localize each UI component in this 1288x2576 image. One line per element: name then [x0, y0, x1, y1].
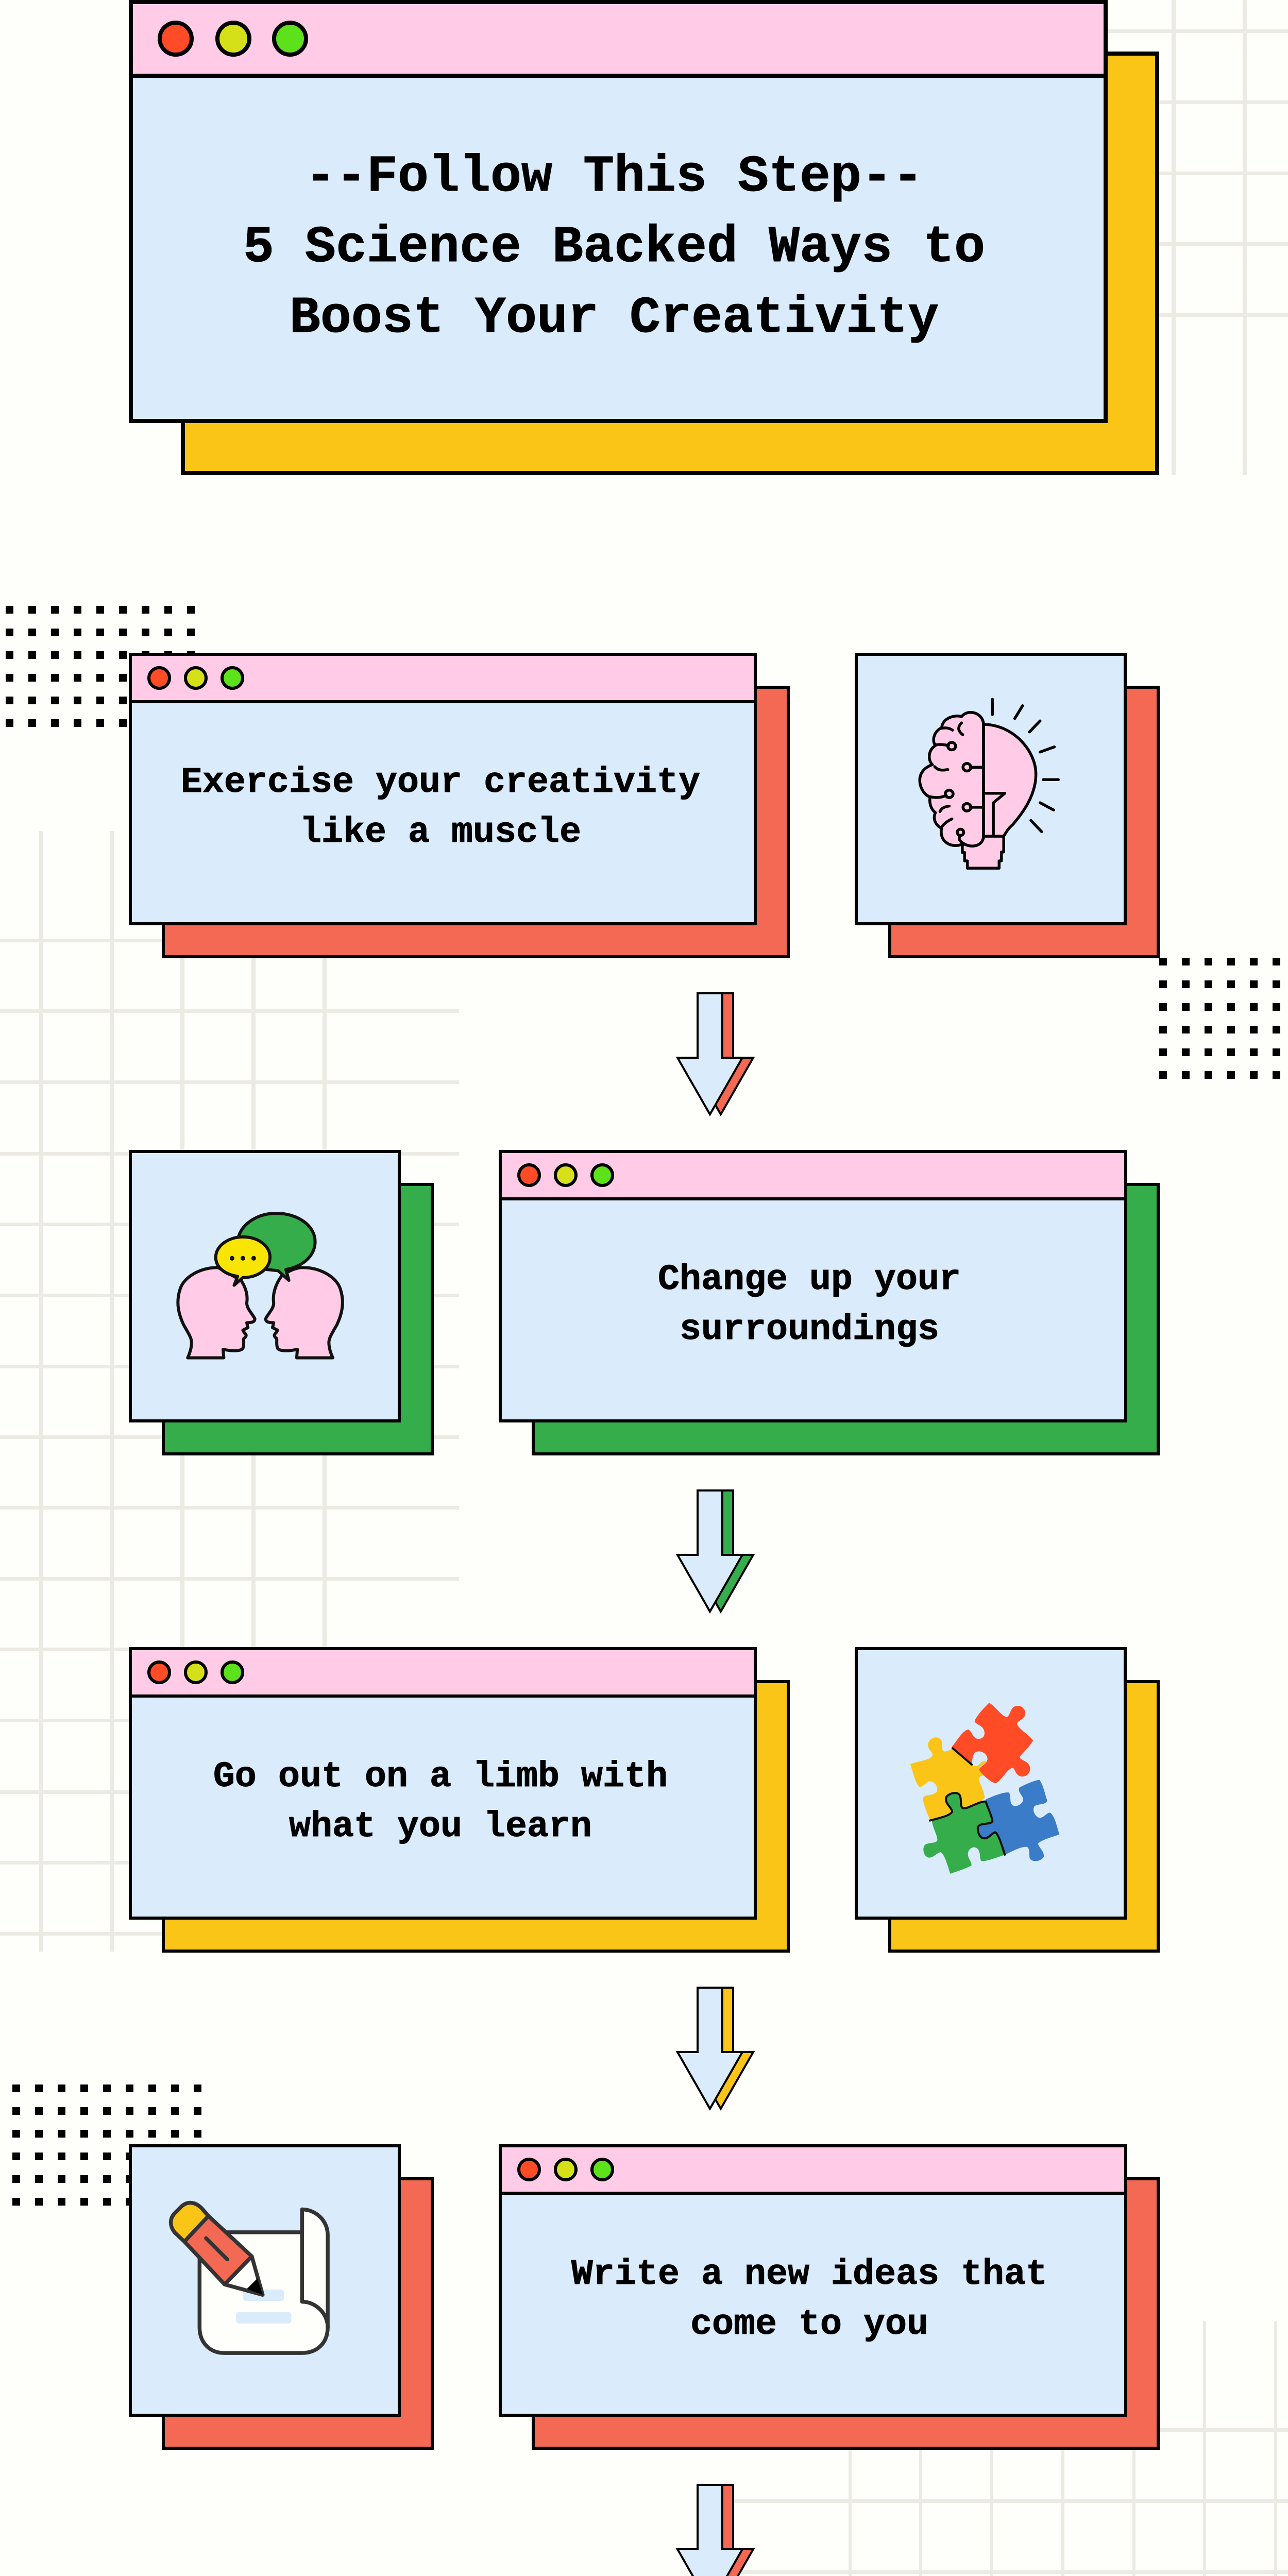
icon: brain light bulb [920, 699, 1058, 868]
arrow: step 1 to 2 [677, 993, 753, 1114]
step 4 text: come to you [690, 2304, 928, 2345]
step 2 text: surroundings [680, 1310, 939, 1350]
arrow: step 4 to 5 [677, 2485, 753, 2576]
dot pattern: upper left [6, 606, 195, 727]
panel: step 4 text window [500, 2146, 1158, 2448]
step 1 text: like a muscle [300, 812, 581, 853]
step 3 text: what you learn [289, 1807, 592, 1848]
icon: puzzle pieces [910, 1703, 1059, 1874]
panel: step 2 icon window [130, 1151, 432, 1454]
panel: step 1 icon window [856, 654, 1158, 957]
panel: step 2 text window [500, 1151, 1158, 1454]
dot pattern: mid left [12, 2084, 201, 2206]
step 3 text: Go out on a limb with [213, 1757, 668, 1798]
title: --Follow This Step-- [305, 148, 923, 207]
panel: step 1 text window [130, 654, 788, 957]
arrow: step 2 to 3 [677, 1490, 753, 1612]
title: 5 Science Backed Ways to [243, 219, 985, 277]
step 2 text: Change up your [658, 1260, 961, 1300]
arrow: step 3 to 4 [677, 1988, 753, 2109]
panel: step 3 icon window [856, 1649, 1158, 1951]
panel: hero title window [131, 2, 1157, 473]
icon: two heads talking [178, 1213, 343, 1358]
step 4 text: Write a new ideas that [571, 2255, 1047, 2295]
step 1 text: Exercise your creativity [181, 762, 700, 803]
title: Boost Your Creativity [290, 290, 939, 348]
icon: pencil and paper scroll [171, 2203, 328, 2353]
dot pattern: right [1159, 958, 1288, 1079]
panel: step 3 text window [130, 1649, 788, 1951]
panel: step 4 icon window [130, 2146, 432, 2448]
